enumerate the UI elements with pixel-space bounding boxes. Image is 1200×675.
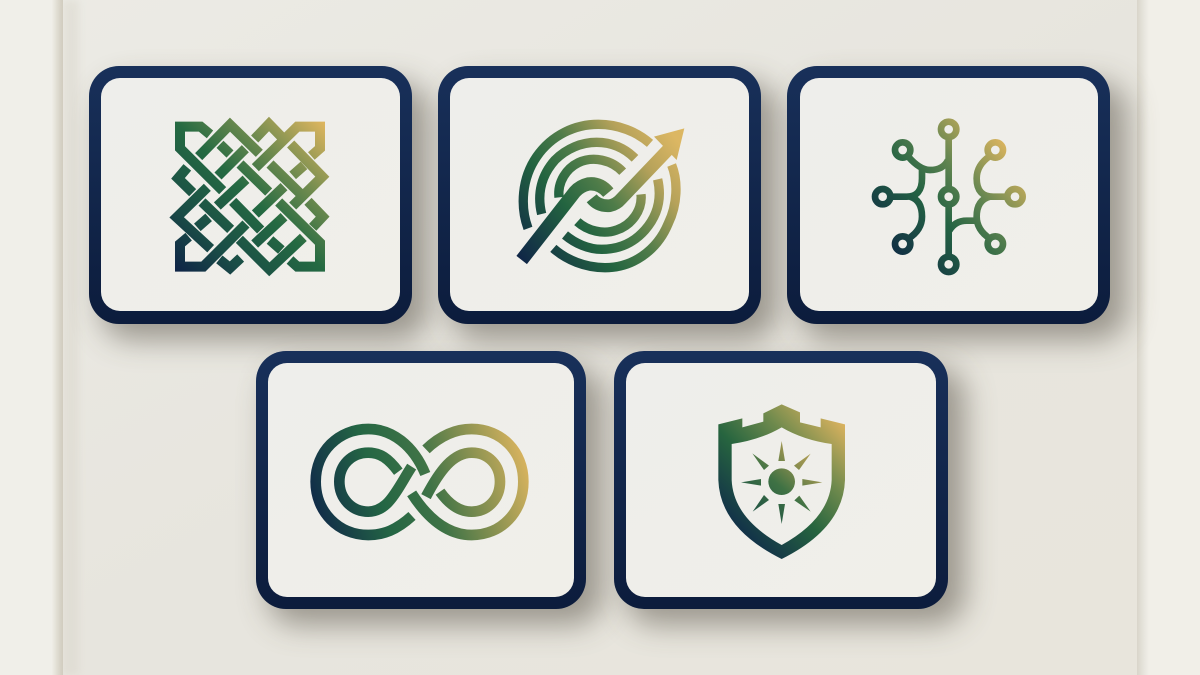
panel: shield card <box>614 351 965 625</box>
icon: branching network <box>875 122 1023 272</box>
panel: woven knot card <box>89 66 429 340</box>
icon: concentric target with rising arrow <box>522 124 684 268</box>
panel: infinity loop card <box>256 351 603 625</box>
icon: woven square knot <box>177 124 323 269</box>
icon: castle shield with sun <box>718 404 845 559</box>
panel: growth target card <box>438 66 778 340</box>
icon: interlaced infinity <box>316 429 523 535</box>
panel: network nodes card <box>787 66 1127 340</box>
